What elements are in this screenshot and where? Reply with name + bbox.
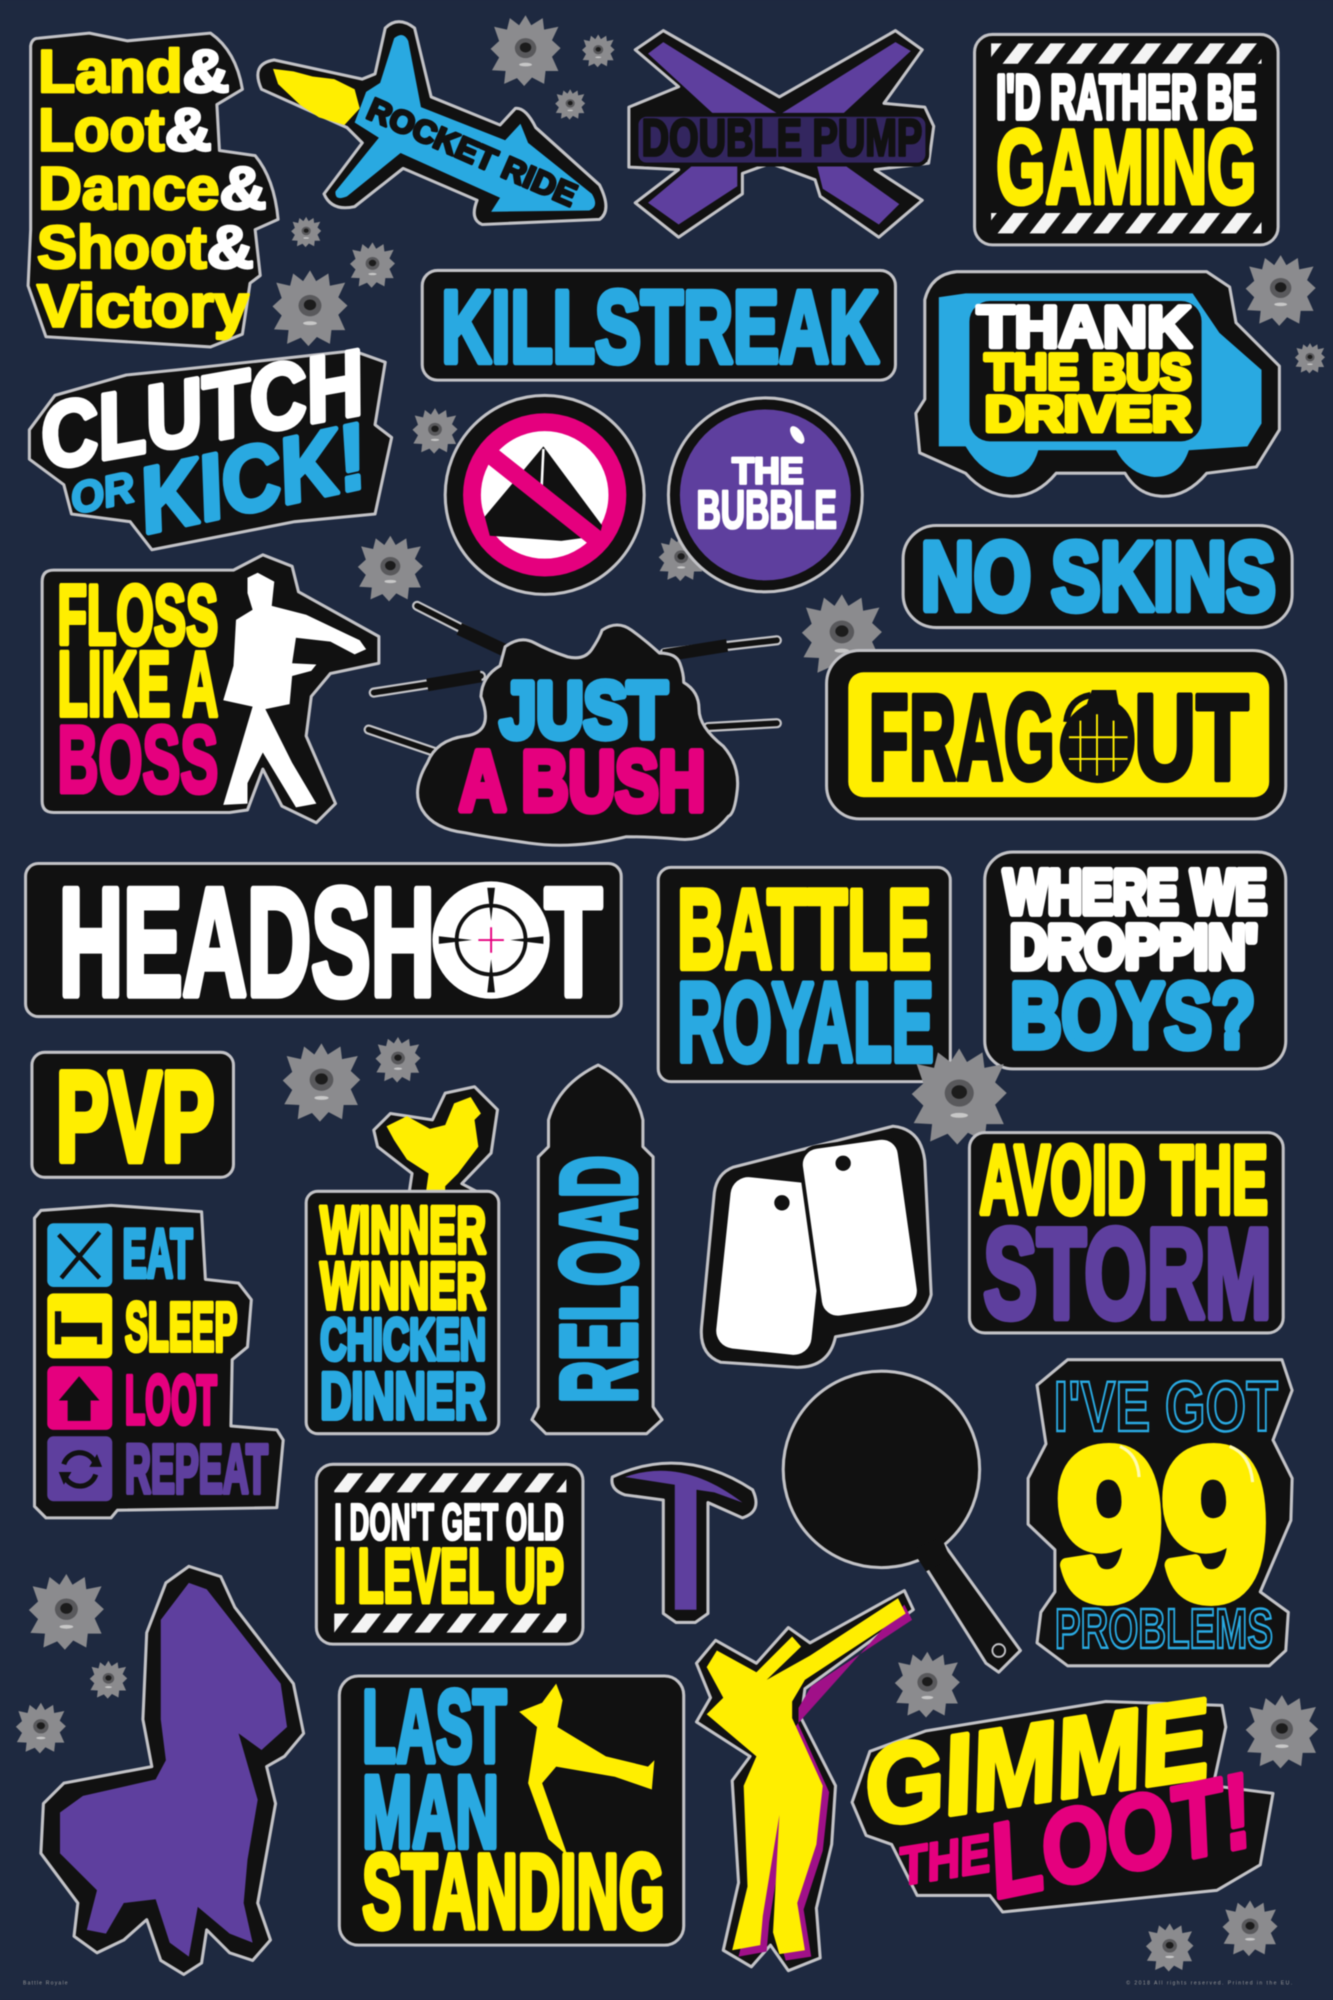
icon: crosshair [432,881,550,999]
sticker: where we droppin boys: DROPPIN' [1010,913,1258,981]
sticker: rocket ride plane [258,22,606,224]
sticker: where we droppin boys: BOYS? [1010,965,1255,1067]
sticker: pvp [32,1047,233,1189]
sticker: eat sleep loot repeat: LOOT [125,1361,217,1438]
sticker: double pump shotguns [629,31,934,237]
copyright line: © 2018 All rights reserved. Printed in the EU. [1126,1980,1292,1987]
eat row: EAT [122,1215,193,1292]
sticker: gimme the loot: LOOT! [978,1752,1262,1920]
sticker: killstreak [422,270,895,384]
sticker: floss like a boss: FLOSS [57,568,218,662]
sticker: land loot dance shoot victory: & [219,155,267,222]
sticker: double pump shotguns: DOUBLE PUMP [642,110,922,168]
sticker: pickaxe [612,1463,756,1622]
sticker: dog tags [701,1126,931,1367]
sticker: the bubble: THE [732,450,804,491]
sticker: land loot dance shoot victory: Dance [38,155,219,222]
sticker: clutch or kick [29,332,392,553]
sticker: headshot: T [545,857,602,1028]
sticker: 99 problems: 99 [1057,1406,1267,1642]
sticker: frag out: UT [1134,668,1249,805]
sticker: floss like a boss [42,555,379,823]
sticker: land loot dance shoot victory: Loot [38,97,165,164]
sticker: eat sleep loot repeat [34,1205,283,1518]
figure [519,1684,654,1856]
sticker: the bubble [668,398,862,592]
sticker: gimme the loot [852,1675,1273,1920]
sticker: floss like a boss: BOSS [57,708,218,813]
sticker: winner winner chicken dinner [306,1087,499,1434]
sticker: just a bush [369,606,777,845]
eat row [47,1215,193,1292]
sticker: last man standing: STANDING [362,1833,665,1950]
sticker: avoid the storm [969,1125,1283,1346]
sticker: no camping sign [445,395,644,594]
rifles [369,606,777,753]
sticker: just a bush: A BUSH [459,734,705,828]
tent [485,446,602,541]
sticker: where we droppin boys [985,852,1286,1069]
sticker: last man standing: MAN [362,1755,499,1869]
sticker: I don't get old I level up [316,1464,583,1644]
sticker: floss like a boss: LIKE A [57,634,218,736]
sticker: last man standing: LAST [362,1669,506,1783]
sticker: thank the bus driver [916,272,1279,496]
sticker: land loot dance shoot victory: Victory [37,273,249,340]
sticker: gimme the loot: GIMME [855,1675,1219,1850]
sticker: land loot dance shoot victory [28,33,278,347]
icon: rooster [374,1087,497,1200]
sticker: winner winner chicken dinner: CHICKEN [320,1308,486,1373]
sticker: land loot dance shoot victory: Shoot [37,214,207,281]
sticker: thank the bus driver: THE BUS [985,344,1191,400]
sticker: battle royale: ROYALE [677,959,934,1085]
sticker: land loot dance shoot victory: Land [38,38,182,105]
sticker: thank the bus driver: THANK [977,295,1191,360]
sticker: winner winner chicken dinner: WINNER [320,1250,486,1324]
sticker: killstreak: KILLSTREAK [441,270,879,384]
sticker: land loot dance shoot victory: & [182,38,230,105]
sticker: I don't get old I level up: I DON'T GET OLD [334,1494,564,1551]
bullet hole over battle royale corner [912,1048,1007,1144]
sticker: battle royale: BATTLE [677,866,931,992]
sticker: frag out: FRAG [869,668,1055,805]
sticker: headshot: HEADSH [59,857,435,1028]
sticker: the bubble: BUBBLE [696,481,837,540]
sticker: thank the bus driver: DRIVER [985,386,1191,442]
sticker: winner winner chicken dinner: WINNER [320,1194,486,1268]
sleep row [47,1289,237,1366]
sticker: pvp: PVP [56,1047,214,1189]
sticker: dab figure [696,1591,913,1971]
sticker: rocket ride plane: ROCKET RIDE [362,91,582,213]
icon: grenade [1060,690,1135,783]
sticker: last man standing [339,1669,684,1950]
sticker: I'd rather be gaming [975,34,1278,245]
sticker: land loot dance shoot victory: & [207,214,254,281]
sticker: frying pan [783,1371,1020,1672]
sticker: land loot dance shoot victory: & [165,97,212,164]
sticker: reload bullet: RELOAD [538,1156,658,1403]
repeat row [47,1430,268,1507]
sticker: clutch or kick: CLUTCH [32,332,372,489]
sticker: just a bush: JUST [500,665,667,754]
sticker: reload bullet [532,1065,662,1434]
sticker: clutch or kick: KICK! [130,405,375,553]
repeat row: REPEAT [125,1430,268,1507]
sticker: battle royale [658,866,950,1085]
sticker: gimme the loot: THE [894,1824,996,1897]
sticker: eat sleep loot repeat: SLEEP [125,1289,237,1366]
sticker: winner winner chicken dinner: DINNER [320,1359,486,1433]
sticker: frag out [827,651,1286,819]
sticker: clutch or kick: OR [66,463,139,524]
copyright line: Battle Royale [23,1981,68,1987]
loot row [47,1361,217,1438]
sticker: llama [41,1566,304,1974]
sticker: I don't get old I level up: I LEVEL UP [334,1534,564,1619]
copyright line [23,1980,1292,1987]
sticker: 99 problems [1028,1360,1292,1666]
